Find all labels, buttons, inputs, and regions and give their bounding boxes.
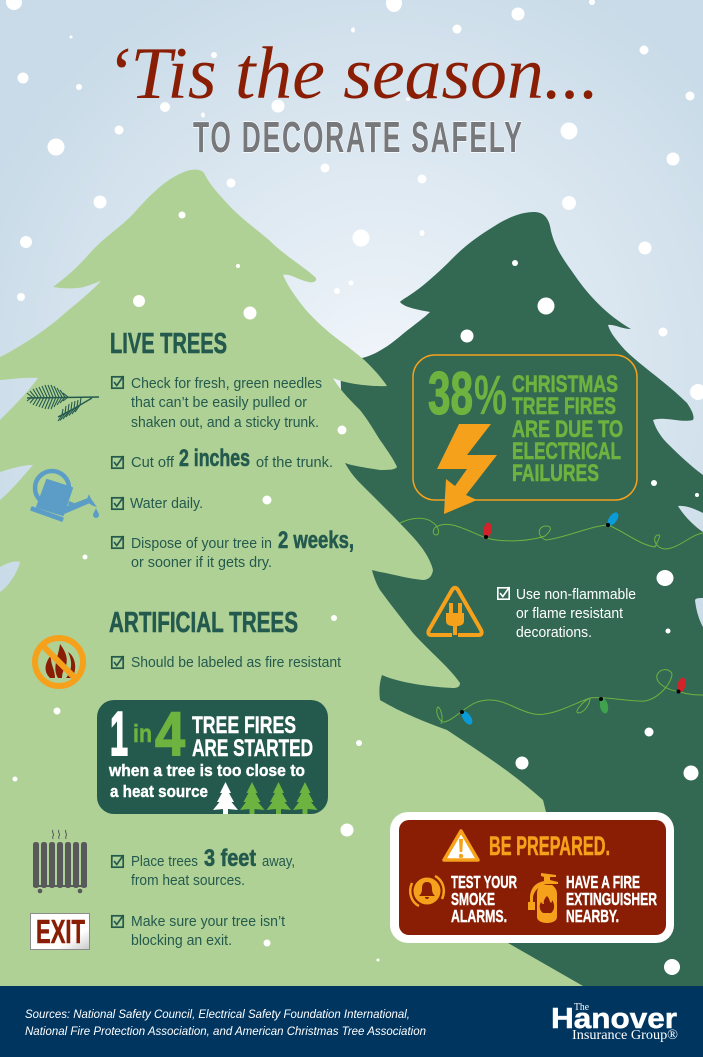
callout: 38 percent [413, 355, 637, 514]
logo: hanover: Hanover [551, 1003, 677, 1035]
icon: exit sign: EXIT [36, 913, 85, 950]
item: fresh needles: shaken out, and a sticky trunk. [131, 415, 319, 431]
string of lights: upper [400, 511, 703, 549]
callout: 38 percent: CHRISTMAS [512, 371, 618, 398]
item: exit: blocking an exit. [131, 933, 232, 949]
item: decorations: or flame resistant [516, 606, 623, 622]
item: cut trunk: 2 inches [179, 445, 250, 472]
item: decorations [498, 587, 636, 641]
callout: 1 in 4 [97, 700, 328, 814]
callout: 1 in 4: TREE FIRES [192, 712, 296, 739]
item: place trees: away, [262, 854, 295, 870]
item: exit [112, 914, 285, 949]
icon: exit sign [30, 913, 90, 950]
item: place trees: from heat sources. [131, 873, 245, 889]
item: place trees: 3 feet [204, 845, 256, 872]
heading: live trees: LIVE TREES [110, 328, 227, 360]
text: test smoke alarms: SMOKE [451, 889, 495, 909]
item: cut trunk [112, 445, 333, 472]
text: extinguisher: HAVE A FIRE [566, 872, 640, 892]
sources [25, 1009, 426, 1038]
callout: 38 percent: FAILURES [512, 460, 599, 487]
item: dispose: 2 weeks, [278, 527, 354, 554]
panel: be prepared [390, 812, 674, 943]
title: ‘Tis the season... [106, 33, 599, 115]
callout: 1 in 4: ARE STARTED [192, 735, 313, 762]
item: place trees: Place trees [131, 854, 198, 870]
sources: National Fire Protection Association, and American Christmas Tree Association [25, 1026, 426, 1038]
text: test smoke alarms: ALARMS. [451, 906, 507, 926]
sources: Sources: National Safety Council, Electrical Safety Foundation International, [25, 1009, 410, 1021]
logo: hanover: Insurance Group® [572, 1027, 678, 1042]
item: water daily: Water daily. [130, 496, 203, 512]
item: cut trunk: Cut off [131, 455, 175, 471]
text: test smoke alarms [451, 872, 517, 926]
item: exit: Make sure your tree isn’t [131, 914, 285, 930]
icon: radiator [33, 830, 87, 893]
heading: be prepared: BE PREPARED. [489, 831, 610, 861]
item: decorations: decorations. [516, 625, 592, 641]
heading: artificial trees: ARTIFICIAL TREES [109, 607, 298, 639]
icon: four trees [213, 782, 318, 814]
panel: artificial trees [35, 607, 341, 686]
item: dispose: Dispose of your tree in [131, 536, 272, 552]
callout: 1 in 4: 1 [110, 700, 128, 769]
callout: 38 percent: 38 [428, 360, 473, 427]
callout: 38 percent: ELECTRICAL [512, 438, 621, 465]
item: cut trunk: of the trunk. [256, 455, 333, 471]
icon: lightning bolt [437, 424, 497, 514]
logo: hanover: The [574, 1002, 590, 1013]
icon: warning triangle [444, 831, 478, 860]
icon: watering can [31, 471, 99, 521]
item: decorations: Use non-flammable [516, 587, 636, 603]
icon: fire extinguisher [528, 873, 558, 923]
text: test smoke alarms: TEST YOUR [451, 872, 517, 892]
light green tree [0, 170, 583, 986]
callout: 38 percent: TREE FIRES [512, 393, 616, 420]
item: place trees [112, 845, 295, 889]
callout: 1 in 4: a heat source [110, 783, 208, 801]
footer [0, 986, 703, 1057]
text: extinguisher [566, 872, 657, 926]
callout: 38 percent: ARE DUE TO [512, 416, 623, 443]
panel: live trees [27, 328, 354, 571]
icon: pine branch [27, 385, 99, 421]
item: fresh needles [112, 376, 322, 431]
item: fresh needles: that can’t be easily pulled or [131, 395, 307, 411]
callout: 38 percent: % [474, 363, 507, 426]
item: fire resistant: Should be labeled as fire resistant [131, 655, 341, 671]
icon: plug warning [428, 588, 482, 635]
text: extinguisher: NEARBY. [566, 906, 619, 926]
icon: smoke alarm bell [410, 876, 444, 906]
string of lights: lower [437, 670, 703, 726]
item: fresh needles: Check for fresh, green needles [131, 376, 322, 392]
item: dispose: or sooner if it gets dry. [131, 555, 272, 571]
subtitle: TO DECORATE SAFELY [193, 112, 522, 162]
item: dispose [112, 527, 354, 571]
text: extinguisher: EXTINGUISHER [566, 889, 657, 909]
callout: 1 in 4: 4 [155, 700, 185, 769]
icon: no fire [35, 638, 83, 686]
callout: 1 in 4: in [133, 720, 152, 748]
dark green tree [340, 212, 703, 986]
callout: 1 in 4: when a tree is too close to [108, 762, 305, 780]
